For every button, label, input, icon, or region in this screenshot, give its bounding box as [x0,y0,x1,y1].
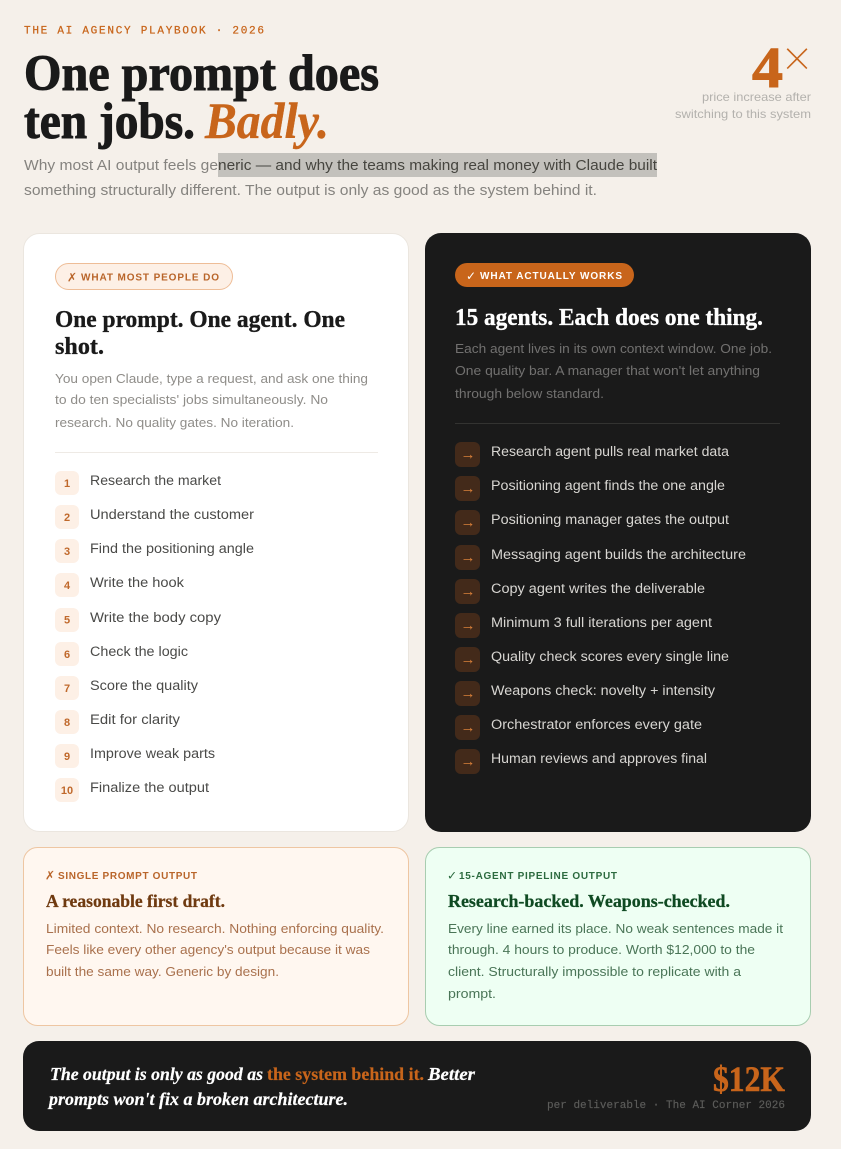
subtitle with highlighted selection: Why most AI output feels ge [24,157,218,174]
subtitle with highlighted selection: something structurally different. The output is only as good as the system behind it. [24,182,597,199]
body text: Limited context. No research. Nothing enforcing quality. [46,921,384,936]
step 3 [55,539,254,563]
agent 4: → [460,549,476,566]
title [24,46,379,150]
body text: built the same way. Generic by design. [46,964,279,979]
numbered list [55,471,255,802]
step 7: Score the quality [90,678,198,693]
agent 4 [455,545,746,570]
step 4 [55,573,184,597]
badge: what actually works [455,263,634,287]
stat: 4x price increase: 4 [752,35,783,100]
description: to do ten specialists' jobs simultaneously. No [55,392,328,407]
agent 5: Copy agent writes the deliverable [491,581,705,596]
banner: closing statement [23,1041,811,1131]
body text [46,921,384,979]
label: ✓ [447,868,457,882]
heading: Research-backed. Weapons-checked. [448,891,730,911]
label: SINGLE PROMPT OUTPUT [58,871,197,882]
step 10: Finalize the output [90,780,209,795]
agent 2: Positioning agent finds the one angle [491,478,725,493]
heading: shot. [55,334,104,360]
agent 4: Messaging agent builds the architecture [491,547,746,562]
badge: what most people do: ✗ [67,270,77,284]
agent 10: Human reviews and approves final [491,751,707,766]
body text: Feels like every other agency's output because it was [46,942,371,957]
title: Badly. [204,94,329,150]
step 3: Find the positioning angle [90,541,254,556]
badge: what most people do [56,264,232,290]
heading: 15 agents. Each does one thing. [455,305,763,331]
stat: $12K: per deliverable · The AI Corner 2026 [547,1100,785,1112]
label: 15-AGENT PIPELINE OUTPUT [459,871,617,882]
description: One quality bar. A manager that won't let anything [455,363,760,378]
subtitle with highlighted selection: neric — and why the teams making real money with Claude built [218,157,658,174]
body text [448,921,783,1001]
step 1: Research the market [90,473,221,488]
badge: what actually works: ✓ [466,269,476,283]
heading [55,307,345,360]
step 8 [55,710,180,734]
step 1: 1 [64,478,70,490]
heading: One prompt. One agent. One [55,307,345,333]
panel: what most people do [24,234,408,832]
panel: single prompt output [24,848,408,1026]
step 7: 7 [64,683,70,695]
step 4: Write the hook [90,575,184,590]
agent 9: → [460,719,476,736]
badge: what most people do: WHAT MOST PEOPLE DO [81,272,219,284]
agent 8: → [460,685,476,702]
agent 2 [455,476,725,501]
agent 5 [455,579,705,604]
quote: The output is only as good as [50,1064,263,1084]
step 7 [55,676,198,700]
step 5: 5 [64,614,70,626]
description: You open Claude, type a request, and ask one thing [55,371,368,386]
stat: 4x price increase: × [782,28,813,89]
description: research. No quality gates. No iteration. [55,415,294,430]
step 1 [55,471,221,495]
step 10 [55,778,209,802]
quote: prompts won't fix a broken architecture. [47,1089,348,1109]
pipeline list [455,442,746,774]
step 5: Write the body copy [90,610,221,625]
panel: what actually works [425,233,811,832]
agent 7: → [460,651,476,668]
label: ✗ [45,868,55,882]
step 6: Check the logic [90,644,188,659]
quote [47,1064,475,1109]
agent 6: Minimum 3 full iterations per agent [491,615,712,630]
agent 1 [455,442,730,467]
heading: A reasonable first draft. [46,891,225,911]
agent 6: → [460,617,476,634]
agent 3 [455,510,729,535]
body text: Every line earned its place. No weak sentences made it [448,921,783,936]
quote: Better [427,1064,475,1084]
body text: prompt. [448,986,496,1001]
stat: $12K [547,1059,785,1112]
agent 5: → [460,583,476,600]
quote: the system behind it. [267,1064,424,1084]
step 2: 2 [64,512,70,524]
panel: 15-agent pipeline output [426,848,810,1026]
stat: 4x price increase: price increase after [702,90,811,104]
agent 9 [455,715,702,740]
badge: what actually works: WHAT ACTUALLY WORKS [480,271,622,282]
description [55,371,368,430]
step 9: Improve weak parts [90,746,215,761]
step 5 [55,608,221,632]
stat: 4x price increase [675,28,813,121]
body text: through. 4 hours to produce. Worth $12,000 to the [448,942,755,957]
step 4: 4 [64,580,71,592]
step 9: 9 [64,751,70,763]
step 3: 3 [64,546,70,558]
body text: client. Structurally impossible to replicate with a [448,964,742,979]
agent 2: → [460,480,476,497]
agent 10 [455,749,707,774]
agent 10: → [460,753,476,770]
step 8: Edit for clarity [90,712,180,727]
agent 9: Orchestrator enforces every gate [491,717,702,732]
agent 7: Quality check scores every single line [491,649,729,664]
description: Each agent lives in its own context window. One job. [455,341,772,356]
description: through below standard. [455,386,604,401]
step 2 [55,505,255,529]
subtitle with highlighted selection [24,153,658,199]
description [455,341,772,401]
step 2: Understand the customer [90,507,255,522]
agent 1: → [460,446,476,463]
agent 1: Research agent pulls real market data [491,444,730,459]
step 6: 6 [64,649,70,661]
eyebrow: THE AI AGENCY PLAYBOOK · 2026 [24,26,264,38]
agent 3: Positioning manager gates the output [491,512,729,527]
agent 3: → [460,514,476,531]
header [24,26,658,199]
agent 8 [455,681,715,706]
agent 6 [455,613,712,638]
stat: 4x price increase: switching to this system [675,107,811,121]
agent 8: Weapons check: novelty + intensity [491,683,715,698]
title: ten jobs. [24,94,195,150]
step 8: 8 [64,717,70,729]
agent 7 [455,647,729,672]
title: One prompt does [24,46,379,102]
step 6 [55,642,188,666]
stat: $12K: $12K [713,1059,785,1099]
step 9 [55,744,215,768]
step 10: 10 [61,785,73,797]
